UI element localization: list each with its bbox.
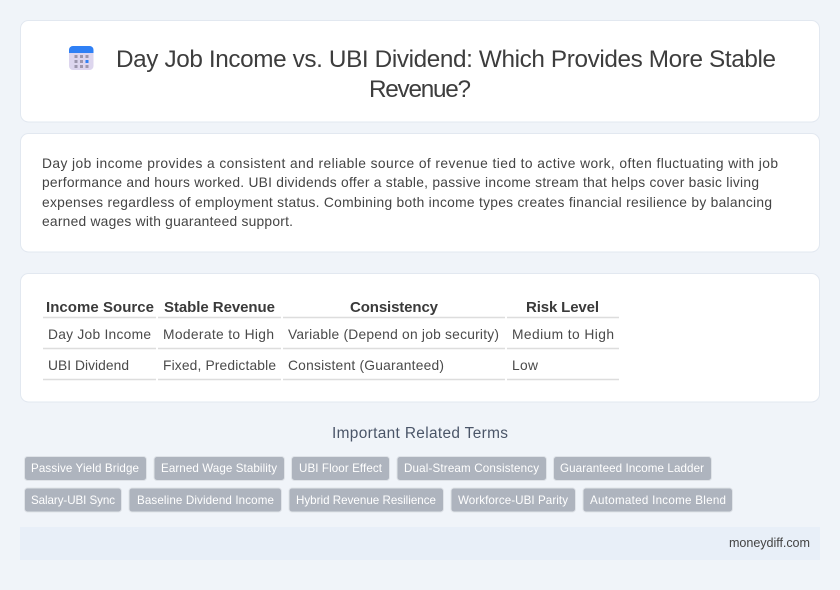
heading: related terms: Important Related Terms (332, 425, 508, 442)
title: Day Job Income vs. UBI Dividend: Which Provides More Stable (116, 46, 776, 73)
table row: Day Job Income: Moderate to High (163, 327, 274, 342)
table row: Day Job Income (48, 327, 614, 342)
table header: Stable Revenue (164, 299, 275, 316)
panel: comparison table (20, 274, 820, 402)
footer (20, 527, 820, 560)
tags: related terms: Hybrid Revenue Resilience (296, 494, 436, 507)
tags: related terms: Earned Wage Stability (161, 462, 277, 475)
tags: related terms: Baseline Dividend Income (137, 494, 274, 507)
text block: summary: expenses regardless of employment status. Combining both income types creates financial resilience by balancing (42, 195, 772, 210)
table row: UBI Dividend: Consistent (Guaranteed) (288, 358, 444, 373)
table row: Day Job Income: Day Job Income (48, 327, 151, 342)
panel: title header (20, 20, 820, 122)
tags: related terms: Workforce-UBI Parity (458, 494, 568, 507)
title (116, 46, 776, 103)
table header: Income Source (46, 299, 154, 316)
table row: UBI Dividend: Fixed, Predictable (163, 358, 276, 373)
table header: Consistency (350, 299, 439, 316)
footer: moneydiff.com (729, 536, 810, 550)
table header (46, 299, 599, 316)
tags: related terms: Salary-UBI Sync (31, 494, 115, 507)
title: Revenue? (369, 76, 471, 103)
tags: related terms: Passive Yield Bridge (31, 462, 139, 475)
table row: Day Job Income: Variable (Depend on job security) (288, 327, 499, 342)
table header: Risk Level (526, 299, 599, 316)
panel: summary text (20, 134, 820, 252)
text block: summary: Day job income provides a consistent and reliable source of revenue tied to active work, often fluctuating with job (42, 156, 778, 171)
table row: UBI Dividend: UBI Dividend (48, 358, 129, 373)
tags: related terms: Dual-Stream Consistency (404, 462, 539, 475)
tags: related terms: UBI Floor Effect (299, 462, 383, 475)
tags: related terms: Guaranteed Income Ladder (560, 462, 704, 475)
tags: related terms: Automated Income Blend (590, 494, 726, 507)
icon: calendar (69, 46, 94, 70)
text block: summary: performance and hours worked. UBI dividends offer a stable, passive income stream that helps cover basic living (42, 175, 759, 190)
tags: related terms (24, 456, 732, 512)
table row: UBI Dividend (48, 358, 538, 373)
table row: Day Job Income: Medium to High (512, 327, 614, 342)
text block: summary: earned wages with guaranteed support. (42, 214, 293, 229)
table row: UBI Dividend: Low (512, 358, 538, 373)
text block: summary (42, 156, 778, 229)
